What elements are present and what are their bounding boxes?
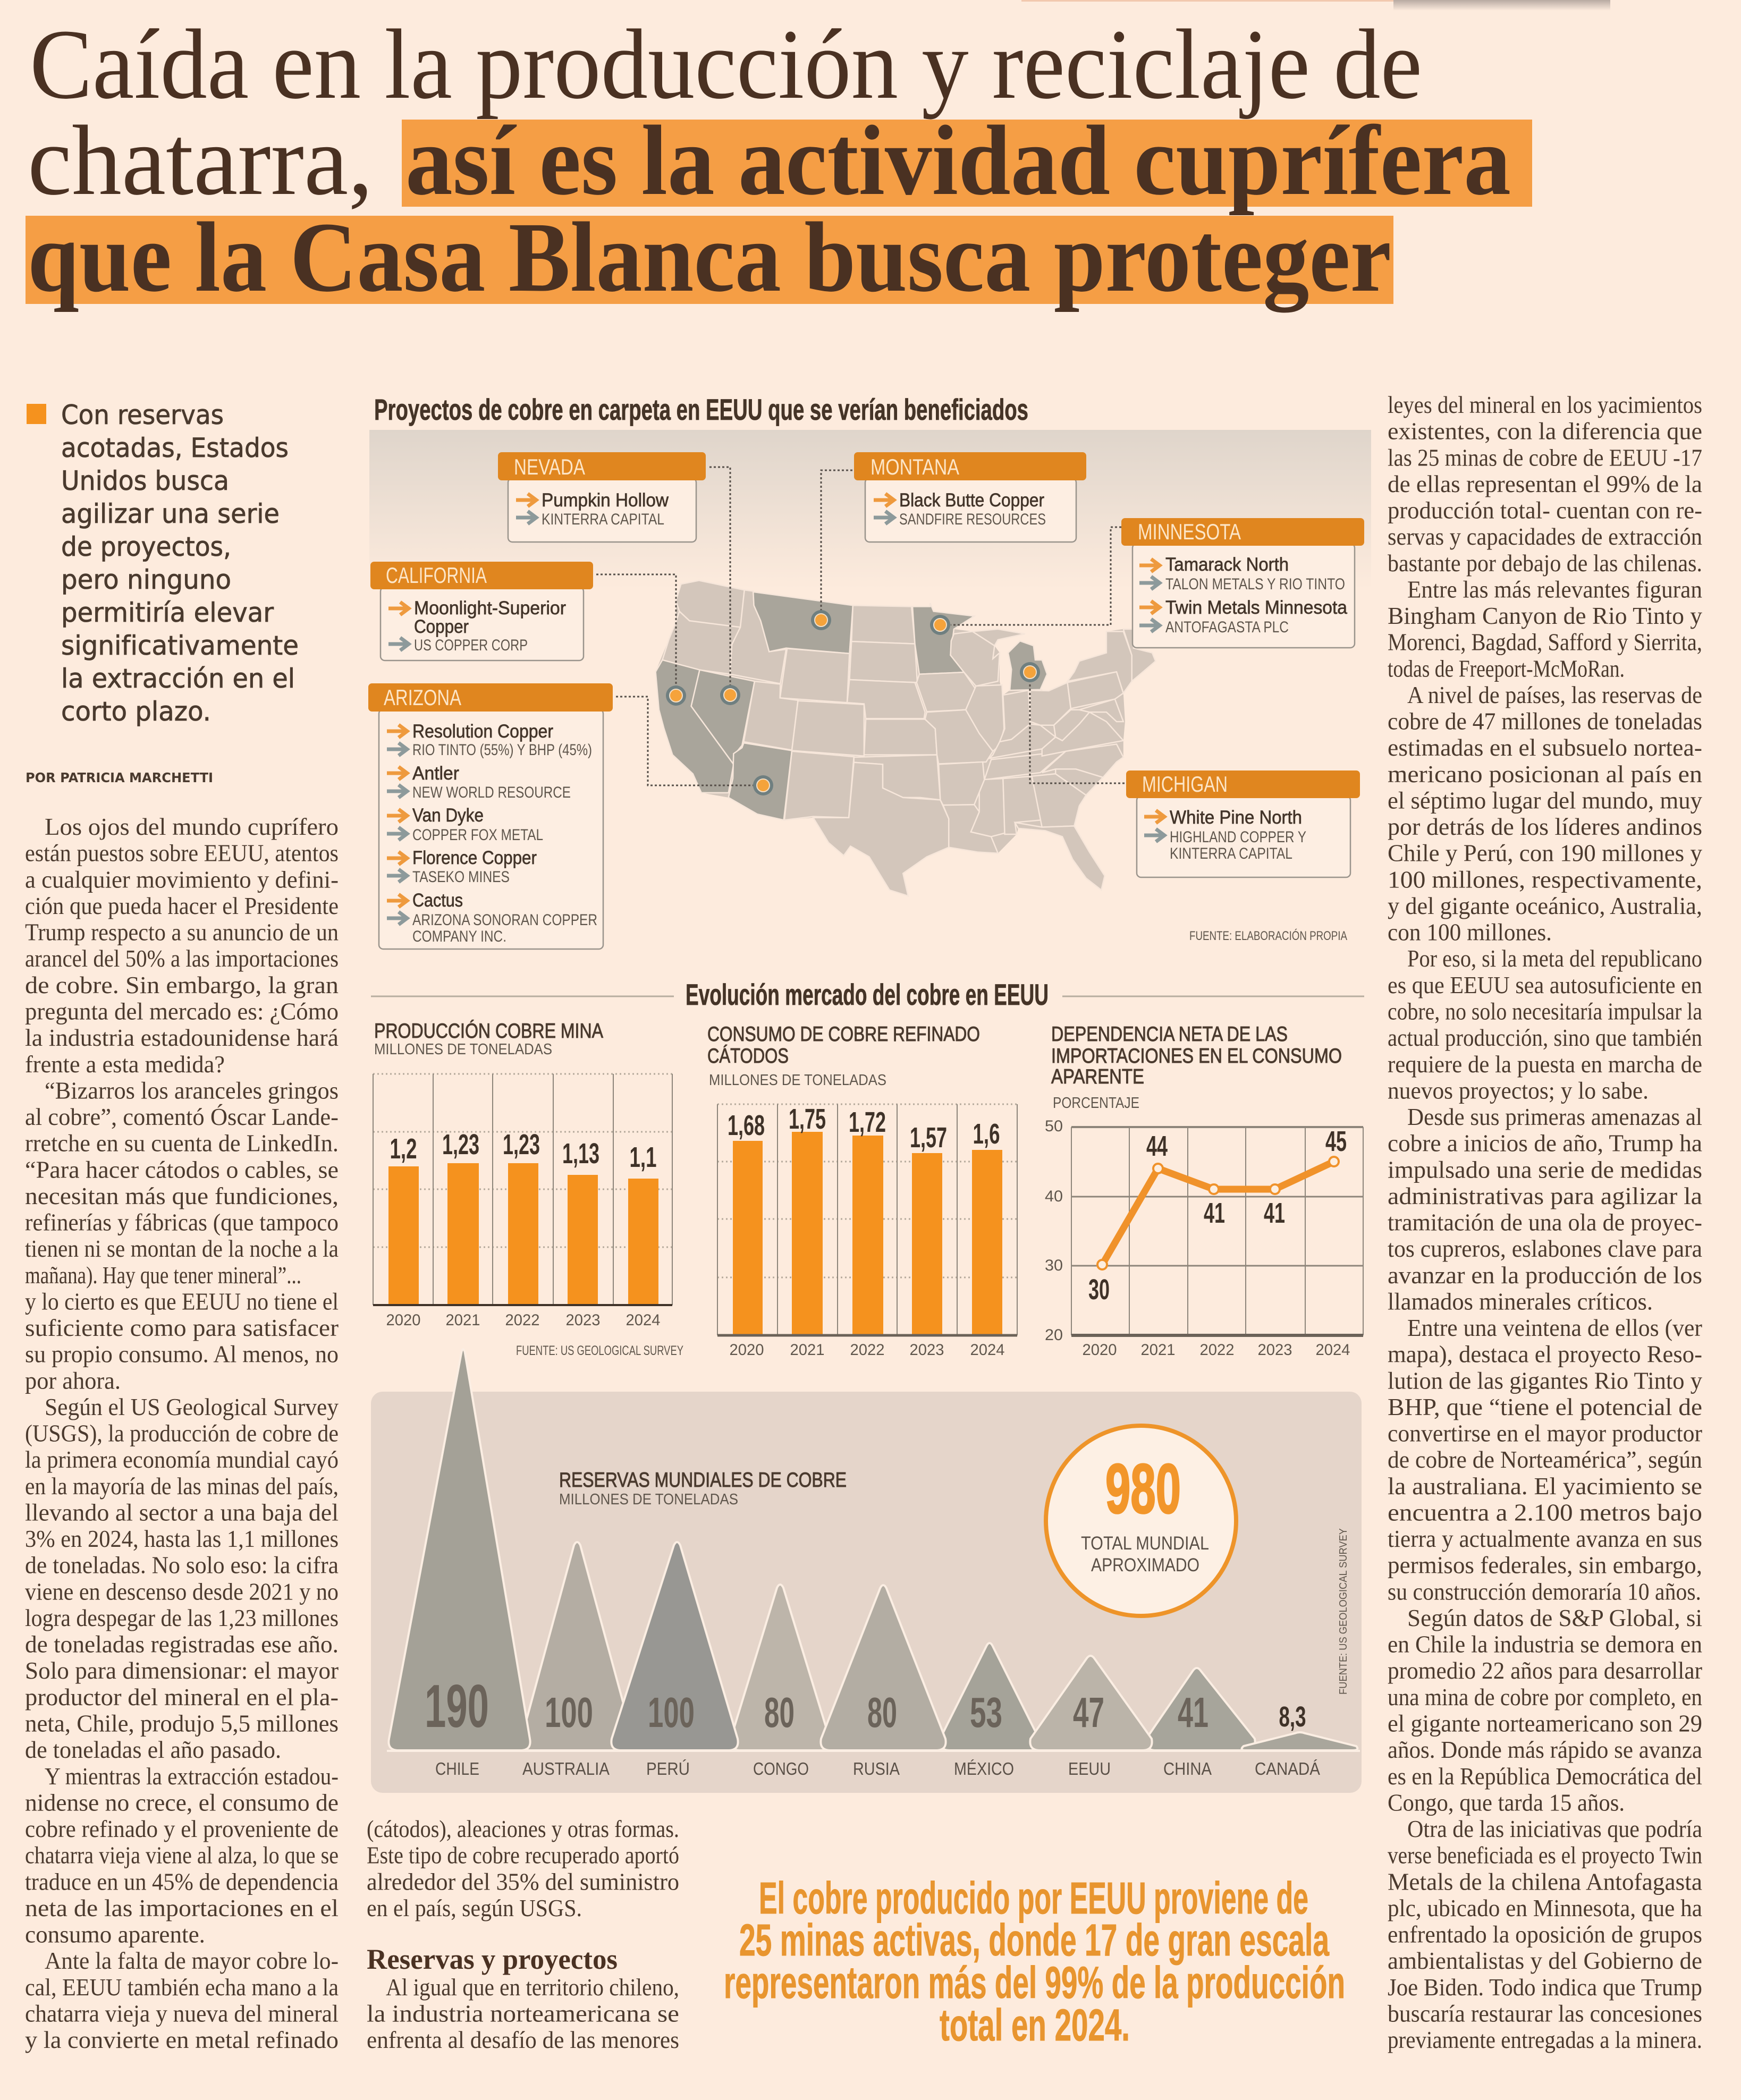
pull quote: El cobre producido por EEUU proviene de bbox=[759, 1873, 1308, 1923]
chart: net import dependence: 30 bbox=[1088, 1274, 1110, 1306]
chart: mine production: 1,23 bbox=[503, 1129, 540, 1161]
box: Montana bbox=[854, 452, 1086, 542]
reserves heading: MILLONES DE TONELADAS bbox=[559, 1491, 738, 1508]
country labels: AUSTRALIA bbox=[522, 1759, 610, 1779]
country labels: CANADÁ bbox=[1255, 1759, 1320, 1779]
article text: right column: el gigante norteamericano son 29 bbox=[1388, 1710, 1702, 1737]
box: Nevada bbox=[498, 452, 706, 542]
article text: right column: Bingham Canyon de Rio Tinto y bbox=[1388, 602, 1702, 629]
article text: left column: la primera economía mundial cayó bbox=[25, 1446, 339, 1473]
article text: right column: leyes del mineral en los yacimientos bbox=[1388, 391, 1702, 418]
chart: mine production: MILLONES DE TONELADAS bbox=[374, 1041, 552, 1058]
chart: net import dependence: 2022 bbox=[1200, 1341, 1234, 1359]
article text: left column: viene en descenso desde 2021 y no bbox=[25, 1578, 339, 1605]
chart: refined copper consumption: CONSUMO DE COBRE REFINADO bbox=[707, 1023, 980, 1046]
article text: right column: la australiana. El yacimiento se bbox=[1388, 1472, 1702, 1500]
article text: right column: 100 millones, respectivamente, bbox=[1388, 866, 1702, 893]
reserve values: 47 bbox=[1073, 1689, 1104, 1736]
article text: right column: Según datos de S&P Global, si bbox=[1407, 1604, 1702, 1631]
box: Minnesota: Twin Metals Minnesota bbox=[1165, 597, 1348, 618]
pull quote bbox=[724, 1873, 1345, 2050]
article text: right column: administrativas para agilizar la bbox=[1388, 1182, 1702, 1209]
article text: right column: buscaría restaurar las concesiones bbox=[1388, 2000, 1702, 2027]
country labels: PERÚ bbox=[646, 1759, 690, 1779]
article text: middle column: (cátodos), aleaciones y otras formas. bbox=[367, 1815, 679, 1842]
box: Montana: Black Butte Copper bbox=[899, 490, 1044, 511]
connector lines bbox=[596, 467, 1125, 785]
reserve values: 80 bbox=[764, 1689, 795, 1736]
article text: right column: con 100 millones. bbox=[1388, 919, 1552, 946]
chart: mine production: 1,23 bbox=[442, 1129, 479, 1161]
article text: right column: cobre a inicios de año, Trump ha bbox=[1388, 1130, 1702, 1157]
article text: left column: rretche en su cuenta de LinkedIn. bbox=[25, 1130, 339, 1157]
article text: left column: nidense no crece, el consumo de bbox=[25, 1789, 339, 1816]
article text: left column: refinerías y fábricas (que tampoco bbox=[25, 1208, 339, 1236]
chart: refined copper consumption: 1,6 bbox=[973, 1118, 1000, 1150]
article text: left column: neta, Chile, produjo 5,5 millones bbox=[25, 1710, 339, 1737]
box: Michigan: MICHIGAN bbox=[1142, 772, 1228, 797]
article text: left column: Según el US Geological Survey bbox=[45, 1393, 339, 1420]
box: Arizona: TASEKO MINES bbox=[412, 868, 510, 886]
box: Michigan: White Pine North bbox=[1170, 807, 1302, 828]
box: Minnesota: ANTOFAGASTA PLC bbox=[1165, 619, 1289, 636]
article text: left column: su propio consumo. Al menos, no bbox=[25, 1341, 339, 1368]
chart: net import dependence: 30 bbox=[1045, 1257, 1063, 1274]
article text: left column: 3% en 2024, hasta las 1,1 millones bbox=[25, 1525, 339, 1552]
heading: market evolution: Evolución mercado del cobre en EEUU bbox=[686, 978, 1049, 1011]
box: Michigan: KINTERRA CAPITAL bbox=[1170, 845, 1292, 862]
reserve values: 190 bbox=[425, 1673, 489, 1740]
reserves heading: RESERVAS MUNDIALES DE COBRE bbox=[559, 1469, 847, 1492]
panel: world copper reserves bbox=[371, 1349, 1362, 1793]
article text: right column: ambientalistas y del Gobierno de bbox=[1388, 1947, 1702, 1974]
heading: map: Proyectos de cobre en carpeta en EEUU que se verían beneficiados bbox=[374, 393, 1028, 426]
deck text: Con reservas bbox=[61, 400, 224, 430]
reserves heading bbox=[559, 1469, 847, 1508]
article text: left column: a cualquier movimiento y defini- bbox=[25, 866, 339, 893]
article text: left column: cal, EEUU también echa mano a la bbox=[25, 1974, 339, 2001]
chart: mine production: 1,2 bbox=[390, 1133, 417, 1165]
chart: net import dependence: 45 bbox=[1325, 1125, 1347, 1157]
chart: refined copper consumption: 1,72 bbox=[849, 1106, 886, 1138]
article text: left column: cobre refinado y el proveniente de bbox=[25, 1815, 339, 1842]
article text: left column bbox=[25, 813, 339, 2053]
callout: world total bbox=[1046, 1426, 1236, 1616]
article text: right column: impulsado una serie de medidas bbox=[1388, 1156, 1702, 1183]
source note: reserves: FUENTE: US GEOLOGICAL SURVEY bbox=[1338, 1528, 1349, 1695]
article text: right column: previamente entregadas a la minera. bbox=[1388, 2026, 1702, 2053]
chart: reserve triangles bbox=[387, 1349, 1360, 1751]
article text: right column: Congo, que tarda 15 años. bbox=[1388, 1789, 1625, 1816]
chart: mine production: 2022 bbox=[505, 1311, 540, 1329]
box: Minnesota bbox=[1121, 518, 1364, 648]
article text: left column: traduce en un 45% de dependencia bbox=[25, 1868, 339, 1895]
chart: refined copper consumption: MILLONES DE TONELADAS bbox=[709, 1072, 886, 1089]
article text: left column: ción que pueda hacer el Presidente bbox=[25, 892, 339, 919]
chart: net import dependence: 2023 bbox=[1257, 1341, 1292, 1359]
chart: net import dependence: 2021 bbox=[1140, 1341, 1176, 1359]
callout: world total: 980 bbox=[1105, 1450, 1181, 1528]
article text: right column: Entre las más relevantes figuran bbox=[1407, 575, 1702, 603]
chart: refined copper consumption: 2024 bbox=[970, 1341, 1004, 1359]
article text: right column: el séptimo lugar del mundo, muy bbox=[1388, 786, 1702, 814]
reserve values bbox=[425, 1673, 1306, 1740]
deck text: la extracción en el bbox=[61, 663, 295, 694]
article text: right column: servas y capacidades de extracción bbox=[1388, 523, 1702, 550]
box: Arizona: ARIZONA SONORAN COPPER bbox=[412, 911, 597, 929]
chart: refined copper consumption: 2020 bbox=[729, 1341, 764, 1359]
article text: left column: chatarra vieja y nueva del mineral bbox=[25, 2000, 339, 2027]
chart: net import dependence: 2020 bbox=[1082, 1341, 1117, 1359]
article text: right column: A nivel de países, las reservas de bbox=[1407, 681, 1702, 708]
article text: left column: y lo cierto es que EEUU no tiene el bbox=[25, 1288, 339, 1315]
chart: net import dependence: 50 bbox=[1045, 1117, 1063, 1135]
chart: net import dependence: 41 bbox=[1204, 1197, 1225, 1229]
box: Arizona: Resolution Copper bbox=[412, 721, 553, 742]
article text: left column: (USGS), la producción de cobre de bbox=[25, 1420, 339, 1447]
title: así es la actividad cuprífera bbox=[405, 105, 1511, 216]
deck text: agilizar una serie bbox=[61, 498, 280, 529]
chart: refined copper consumption: 2023 bbox=[910, 1341, 944, 1359]
article text: left column: de toneladas. No solo eso: la cifra bbox=[25, 1552, 339, 1579]
article text: left column: neta de las importaciones en el bbox=[25, 1894, 339, 1921]
article text: right column: cobre de 47 millones de toneladas bbox=[1388, 708, 1702, 735]
box: California: US COPPER CORP bbox=[414, 637, 528, 654]
article text: right column: tos cupreros, eslabones clave para bbox=[1388, 1235, 1702, 1262]
chart: mine production: PRODUCCIÓN COBRE MINA bbox=[374, 1020, 603, 1043]
box: Arizona: RIO TINTO (55%) Y BHP (45%) bbox=[412, 741, 592, 759]
article text: right column: avanzar en la producción de los bbox=[1388, 1261, 1702, 1289]
chart: mine production: 2021 bbox=[445, 1311, 480, 1329]
article text: left column: pregunta del mercado es: ¿Cómo bbox=[25, 998, 339, 1024]
source note: charts: FUENTE: US GEOLOGICAL SURVEY bbox=[516, 1343, 683, 1358]
article text: left column: y la convierte en metal refinado bbox=[25, 2026, 339, 2053]
chart: refined copper consumption: CÁTODOS bbox=[707, 1045, 789, 1068]
article text: middle column: la industria norteamericana se bbox=[367, 2000, 679, 2027]
box: California bbox=[370, 562, 593, 661]
callout: world total: TOTAL MUNDIAL bbox=[1081, 1533, 1209, 1554]
reserve values: 53 bbox=[970, 1689, 1002, 1736]
chart: refined copper consumption: 1,75 bbox=[789, 1103, 826, 1135]
article text: right column: mericano posicionan al país en bbox=[1388, 760, 1702, 788]
deck text: acotadas, Estados bbox=[61, 433, 289, 463]
box: Arizona: COMPANY INC. bbox=[412, 928, 506, 945]
chart: net import dependence: PORCENTAJE bbox=[1053, 1095, 1139, 1112]
article text: left column: están puestos sobre EEUU, atentos bbox=[25, 840, 339, 867]
box: Arizona: COPPER FOX METAL bbox=[412, 826, 543, 844]
article text: right column: mapa), destaca el proyecto Reso- bbox=[1388, 1341, 1702, 1368]
chart: mine production: 2020 bbox=[386, 1311, 421, 1329]
chart: net import dependence: APARENTE bbox=[1051, 1065, 1144, 1088]
subheading: Reservas y proyectos bbox=[367, 1943, 618, 1975]
article text: right column: permisos federales, sin embargo, bbox=[1388, 1552, 1702, 1579]
box: Minnesota: MINNESOTA bbox=[1138, 519, 1241, 544]
country labels bbox=[435, 1759, 1320, 1779]
reserve values: 100 bbox=[648, 1689, 695, 1736]
article text: right column: producción total- cuentan con re- bbox=[1388, 496, 1702, 524]
article text: left column: tienen ni se montan de la noche a la bbox=[25, 1235, 339, 1262]
article text: left column: Los ojos del mundo cuprífero bbox=[45, 813, 339, 840]
article text: middle column: Este tipo de cobre recuperado aportó bbox=[367, 1842, 679, 1869]
chart: refined copper consumption: 2022 bbox=[850, 1341, 884, 1359]
article text: right column: una mina de cobre por completo, en bbox=[1388, 1683, 1702, 1711]
article text: left column: consumo aparente. bbox=[25, 1920, 205, 1948]
chart: mine production: 1,1 bbox=[629, 1141, 657, 1173]
article text: right column: Morenci, Bagdad, Safford y Sierrita, bbox=[1388, 629, 1702, 656]
article text: right column: tierra y actualmente avanza en sus bbox=[1388, 1525, 1702, 1552]
chart: net import dependence bbox=[1045, 1023, 1363, 1359]
article text: right column: nuevos proyectos; y lo sabe. bbox=[1388, 1077, 1649, 1104]
chart: mine production: 1,13 bbox=[562, 1138, 599, 1170]
article text: left column: al cobre”, comentó Óscar Lande- bbox=[25, 1103, 339, 1130]
article text: left column: “Para hacer cátodos o cables, se bbox=[25, 1156, 339, 1183]
article text: right column: estimadas en el subsuelo nortea- bbox=[1388, 734, 1702, 761]
map: United States bbox=[656, 580, 1155, 896]
box: Arizona: Florence Copper bbox=[412, 848, 537, 868]
article text: right column: enfrentado la oposición de grupos bbox=[1388, 1920, 1702, 1948]
article text: left column: de toneladas el año pasado. bbox=[25, 1736, 281, 1763]
deck text: permitiría elevar bbox=[61, 597, 274, 628]
article text: left column: arancel del 50% a las importaciones bbox=[25, 945, 339, 972]
article text: left column: Trump respecto a su anuncio de un bbox=[25, 919, 339, 946]
article text: right column: Otra de las iniciativas que podría bbox=[1407, 1815, 1702, 1842]
country labels: CHILE bbox=[435, 1759, 479, 1779]
article text: right column: años. Donde más rápido se avanza bbox=[1388, 1736, 1702, 1763]
chart: net import dependence: 2024 bbox=[1316, 1341, 1350, 1359]
article text: left column: productor del mineral en el pla- bbox=[25, 1683, 339, 1711]
deck text: pero ninguno bbox=[61, 564, 231, 595]
article text: left column: Solo para dimensionar: el mayor bbox=[25, 1657, 339, 1684]
article text: right column: Chile y Perú, con 190 millones y bbox=[1388, 840, 1702, 867]
article text: right column: es que EEUU sea autosuficiente en bbox=[1388, 971, 1702, 998]
deck text bbox=[27, 400, 299, 727]
chart: net import dependence: 41 bbox=[1264, 1197, 1285, 1229]
article text: left column: la industria estadounidense hará bbox=[25, 1024, 339, 1051]
article text: left column: de cobre. Sin embargo, la gran bbox=[25, 971, 339, 998]
country labels: CONGO bbox=[753, 1759, 809, 1779]
article text: right column: Entre una veintena de ellos (ver bbox=[1407, 1314, 1702, 1341]
deck text: corto plazo. bbox=[61, 696, 211, 727]
article text: right column: por detrás de los líderes andinos bbox=[1388, 813, 1702, 840]
chart: net import dependence: 40 bbox=[1045, 1188, 1063, 1205]
icon: orange square bbox=[27, 404, 46, 424]
article text: right column: convertirse en el mayor productor bbox=[1388, 1420, 1702, 1447]
reserve values: 80 bbox=[867, 1689, 897, 1736]
article text: right column: las 25 minas de cobre de EEUU -17 bbox=[1388, 444, 1702, 471]
pull quote: representaron más del 99% de la producción bbox=[724, 1958, 1345, 2008]
box: California: Copper bbox=[414, 616, 469, 637]
article text: right column: actual producción, sino que también bbox=[1388, 1024, 1702, 1051]
article text: right column: tramitación de una ola de proyec- bbox=[1388, 1208, 1702, 1236]
article text: right column: es en la República Democrática del bbox=[1388, 1763, 1702, 1790]
article text: right column: cobre, no solo necesitaría impulsar la bbox=[1388, 998, 1702, 1024]
box: Montana: SANDFIRE RESOURCES bbox=[899, 511, 1046, 528]
box: Nevada: Pumpkin Hollow bbox=[542, 490, 669, 511]
article text: right column: de ellas representan el 99% de la bbox=[1388, 470, 1702, 497]
article text: right column: Desde sus primeras amenazas al bbox=[1407, 1103, 1702, 1130]
article text: left column: suficiente como para satisfacer bbox=[25, 1314, 339, 1341]
box: Minnesota: TALON METALS Y RIO TINTO bbox=[1165, 575, 1345, 593]
box: Michigan: HIGHLAND COPPER Y bbox=[1170, 828, 1306, 846]
title: chatarra, bbox=[28, 105, 373, 216]
chart: net import dependence: 44 bbox=[1146, 1130, 1168, 1162]
box: Arizona bbox=[368, 683, 613, 949]
pull quote: 25 minas activas, donde 17 de gran escala bbox=[739, 1915, 1330, 1965]
article text: right column: lution de las gigantes Rio Tinto y bbox=[1388, 1367, 1702, 1394]
article text: left column: necesitan más que fundiciones, bbox=[25, 1182, 339, 1209]
country labels: CHINA bbox=[1163, 1759, 1212, 1779]
callout: world total: APROXIMADO bbox=[1091, 1555, 1199, 1576]
article text: right column: de cobre de Norteamérica”, según bbox=[1388, 1446, 1702, 1473]
chart: mine production: 2023 bbox=[565, 1311, 601, 1329]
article text: left column: llevando al sector a una baja del bbox=[25, 1498, 339, 1526]
article text: middle column bbox=[367, 1815, 679, 2053]
article text: right column: BHP, que “tiene el potencial de bbox=[1388, 1393, 1702, 1420]
article text: right column: plc, ubicado en Minnesota, que ha bbox=[1388, 1894, 1702, 1921]
box: California: CALIFORNIA bbox=[386, 563, 487, 588]
article text: right column: encuentra a 2.100 metros bajo bbox=[1388, 1498, 1702, 1526]
box: Nevada: KINTERRA CAPITAL bbox=[542, 511, 664, 528]
chart: refined copper consumption: 2021 bbox=[790, 1341, 825, 1359]
article text: right column: y del gigante oceánico, Australia, bbox=[1388, 892, 1702, 919]
reserve values: 41 bbox=[1178, 1689, 1208, 1736]
article text: right column: todas de Freeport-McMoRan. bbox=[1388, 655, 1625, 682]
article text: right column: Metals de la chilena Antofagasta bbox=[1388, 1868, 1702, 1895]
article text: left column: frente a esta medida? bbox=[25, 1051, 225, 1078]
reserve values: 100 bbox=[545, 1689, 593, 1736]
title: Caída en la producción y reciclaje de bbox=[30, 9, 1422, 120]
article text: right column: llamados minerales críticos. bbox=[1388, 1288, 1653, 1315]
chart: net import dependence: IMPORTACIONES EN EL CONSUMO bbox=[1051, 1045, 1342, 1068]
article text: middle column: enfrenta al desafío de las menores bbox=[367, 2026, 679, 2053]
panel: project map bbox=[368, 430, 1371, 949]
article text: left column: Ante la falta de mayor cobre lo- bbox=[45, 1947, 339, 1974]
box: Arizona: Cactus bbox=[412, 890, 463, 911]
chart: refined copper consumption bbox=[707, 1023, 1017, 1359]
article text: left column: de toneladas registradas ese año. bbox=[25, 1631, 339, 1658]
article text: left column: en la mayoría de las minas del país, bbox=[25, 1472, 339, 1500]
country labels: EEUU bbox=[1068, 1759, 1111, 1779]
article text: middle column: alrededor del 35% del suministro bbox=[367, 1868, 679, 1895]
chart: refined copper consumption: 1,68 bbox=[728, 1110, 765, 1141]
box: Arizona: NEW WORLD RESOURCE bbox=[412, 784, 571, 801]
chart: net import dependence: 20 bbox=[1045, 1326, 1063, 1344]
article text: left column: mañana). Hay que tener mineral”... bbox=[25, 1261, 301, 1289]
chart: refined copper consumption: 1,57 bbox=[910, 1122, 947, 1154]
article text: right column: en Chile la industria se demora en bbox=[1388, 1631, 1702, 1658]
pull quote: total en 2024. bbox=[940, 2000, 1130, 2050]
article text: left column: por ahora. bbox=[25, 1367, 121, 1394]
title: que la Casa Blanca busca proteger bbox=[28, 201, 1391, 313]
article text: left column: chatarra vieja viene al alza, lo que se bbox=[25, 1842, 339, 1869]
article text: right column: Por eso, si la meta del republicano bbox=[1407, 945, 1702, 972]
byline: POR PATRICIA MARCHETTI bbox=[26, 770, 213, 785]
article text: right column: Joe Biden. Todo indica que Trump bbox=[1388, 1974, 1702, 2001]
article text: left column: logra despegar de las 1,23 millones bbox=[25, 1604, 339, 1631]
article text: right column: promedio 22 años para desarrollar bbox=[1388, 1657, 1702, 1684]
article text: right column bbox=[1388, 391, 1702, 2053]
map pins bbox=[666, 610, 1040, 795]
deck text: significativamente bbox=[61, 630, 299, 661]
title bbox=[26, 9, 1532, 313]
article text: right column: requiere de la puesta en marcha de bbox=[1388, 1051, 1702, 1078]
country labels: MÉXICO bbox=[954, 1759, 1014, 1779]
chart: mine production: 2024 bbox=[626, 1311, 660, 1329]
source note: map: FUENTE: ELABORACIÓN PROPIA bbox=[1189, 929, 1347, 943]
country labels: RUSIA bbox=[853, 1759, 900, 1779]
article text: middle column: Al igual que en territorio chileno, bbox=[386, 1974, 679, 2001]
box: Montana: MONTANA bbox=[870, 454, 959, 479]
deck text: Unidos busca bbox=[61, 465, 229, 496]
article text: left column: “Bizarros los aranceles gringos bbox=[45, 1077, 339, 1104]
article text: right column: su construcción demoraría 10 años. bbox=[1388, 1578, 1701, 1605]
deck text: de proyectos, bbox=[61, 531, 231, 562]
chart: net import dependence: DEPENDENCIA NETA DE LAS bbox=[1051, 1023, 1288, 1046]
box: California: Moonlight-Superior bbox=[414, 598, 566, 619]
chart: mine production bbox=[373, 1020, 672, 1329]
box: Arizona: Antler bbox=[412, 763, 459, 784]
box: Arizona: Van Dyke bbox=[412, 805, 484, 826]
reserve values: 8,3 bbox=[1279, 1701, 1306, 1733]
box: Michigan bbox=[1126, 770, 1360, 877]
article text: right column: bastante por debajo de las chilenas. bbox=[1388, 549, 1702, 577]
box: Arizona: ARIZONA bbox=[384, 685, 461, 710]
box: Nevada: NEVADA bbox=[514, 454, 585, 479]
article text: right column: existentes, con la diferencia que bbox=[1388, 418, 1702, 445]
article text: middle column: en el país, según USGS. bbox=[367, 1894, 582, 1921]
box: Minnesota: Tamarack North bbox=[1165, 554, 1289, 575]
article text: left column: Y mientras la extracción estadou- bbox=[45, 1763, 339, 1790]
